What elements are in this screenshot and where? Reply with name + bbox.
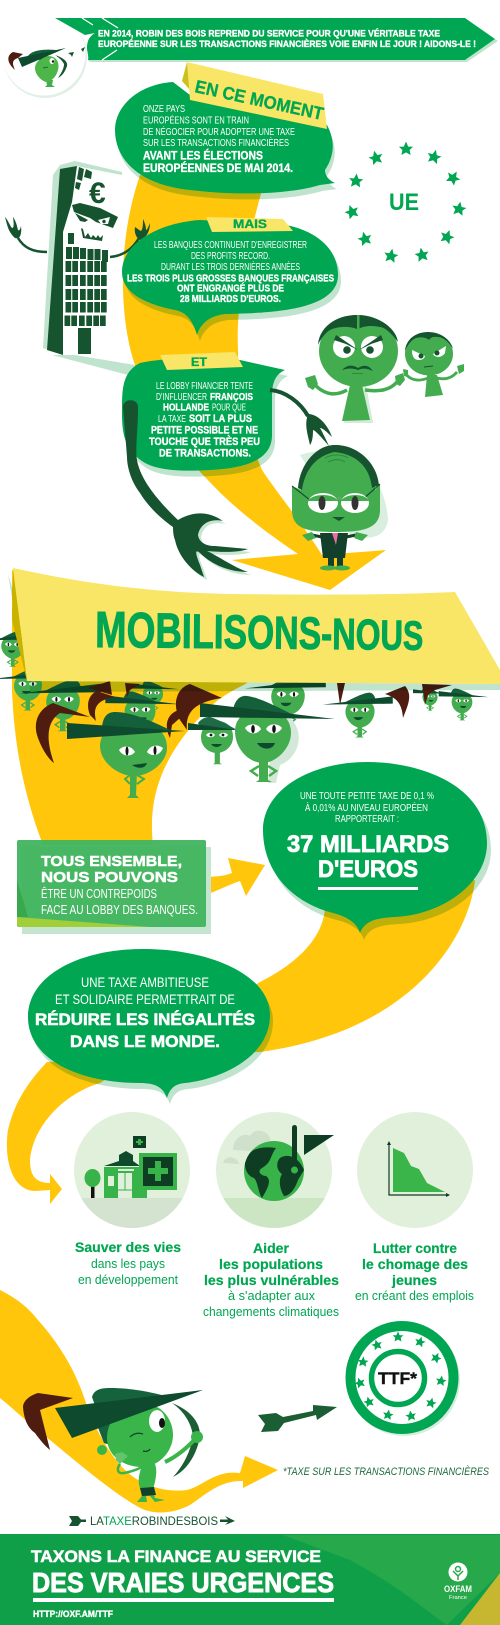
caption: sauver des vies — [75, 1240, 181, 1287]
panel text: TOUS ENSEMBLE, — [41, 853, 182, 870]
footer text: TAXONS LA FINANCE AU SERVICE — [31, 1547, 321, 1566]
bank arms and claws — [18, 238, 139, 257]
footer text — [31, 1547, 334, 1620]
yellow ribbon: bottom section with arrow — [0, 1290, 278, 1512]
flag: et: ET — [191, 355, 208, 369]
Oxfam logo — [444, 1562, 472, 1601]
Oxfam logo: France — [449, 1595, 467, 1601]
bubble text: LA TAXE — [158, 413, 186, 425]
bubble text: FRANÇOIS — [210, 391, 253, 403]
bubble text: DURANT LES TROIS DERNIÈRES ANNÉES — [161, 260, 300, 273]
bubble text: POUR QUE — [212, 402, 246, 414]
header text — [98, 28, 476, 50]
bubble text: SUR LES TRANSACTIONS FINANCIÈRES — [143, 136, 289, 149]
bubble text: DE TRANSACTIONS. — [159, 448, 251, 460]
bubble text: ONT ENGRANGÉ PLUS DE — [177, 282, 284, 294]
bubble text: DES PROFITS RECORD. — [191, 250, 270, 262]
caption: aider les populations: les plus vulnérables — [204, 1273, 339, 1288]
caption: lutter contre le chomage — [355, 1241, 474, 1303]
flag fold — [182, 62, 190, 90]
bubble text — [287, 790, 449, 890]
Hollande character — [292, 445, 388, 570]
bubble text: 37 MILLIARDS — [287, 831, 449, 858]
bubble text: LES TROIS PLUS GROSSES BANQUES FRANÇAISES — [127, 272, 334, 284]
bubble text: D'INFLUENCER — [156, 391, 207, 403]
bubble text — [127, 239, 334, 305]
bubble text: LES BANQUES CONTINUENT D'ENREGISTRER — [154, 239, 307, 251]
panel text: ÊTRE UN CONTREPOIDS — [41, 886, 157, 901]
small character with short hat — [188, 717, 237, 764]
flag: en ce moment — [187, 62, 327, 129]
bubble text: D'EUROS — [318, 856, 418, 883]
bubble: en ce moment — [115, 62, 337, 199]
TTF stars — [353, 1331, 447, 1421]
bubble text: À 0,01% AU NIVEAU EUROPÉEN — [305, 801, 428, 814]
bubble text: LE LOBBY FINANCIER TENTE — [156, 380, 253, 392]
bubble text: RAPPORTERAIT : — [335, 813, 399, 825]
footer text: DES VRAIES URGENCES — [32, 1567, 334, 1598]
euro sign: € — [89, 177, 106, 210]
panel text: NOUS POUVONS — [41, 869, 178, 886]
yellow ribbon: top section — [123, 175, 386, 590]
bubble text: AVANT LES ÉLECTIONS — [143, 150, 263, 162]
footer band — [0, 1534, 500, 1625]
bubble text: DANS LE MONDE. — [70, 1032, 220, 1051]
bubble text: EUROPÉENS SONT EN TRAIN — [143, 114, 249, 126]
UE label: UE — [389, 189, 419, 216]
big robin archer — [23, 1388, 203, 1502]
EU stars — [343, 142, 467, 263]
flag: mais — [206, 217, 293, 232]
small robin bubble — [2, 12, 87, 98]
icon: falling chart — [357, 1112, 473, 1228]
flag: et — [160, 352, 243, 370]
bubble: mais — [122, 217, 341, 341]
caption: aider les populations: changements climatiques — [203, 1305, 339, 1319]
caption: sauver des vies: dans les pays — [91, 1257, 165, 1271]
bubble text — [35, 974, 255, 1051]
caption: sauver des vies: en développement — [78, 1273, 179, 1287]
bubble text — [149, 380, 260, 460]
bank building — [5, 161, 150, 376]
banner: mobilisons-nous — [8, 568, 500, 692]
header arrow banner — [55, 18, 498, 62]
bubble text: RÉDUIRE LES INÉGALITÉS — [35, 1010, 255, 1029]
caption: lutter contre le chomage: en créant des emplois — [355, 1289, 474, 1303]
bubble text: TOUCHE QUE TRÈS PEU — [149, 435, 260, 448]
bubble text: ET SOLIDAIRE PERMETTRAIT DE — [55, 991, 235, 1007]
yellow arrow: towards 37 milliards — [200, 858, 265, 897]
angry character: small — [403, 332, 464, 397]
Oxfam logo: OXFAM — [444, 1584, 472, 1594]
flag: mais: MAIS — [233, 219, 267, 231]
caption: aider les populations — [203, 1241, 339, 1319]
TTF badge — [348, 1324, 460, 1436]
TTF label: TTF* — [378, 1369, 417, 1388]
caption: lutter contre le chomage: Lutter contre — [373, 1241, 457, 1256]
bubble text: SOIT LA PLUS — [189, 413, 252, 425]
small robin — [8, 47, 85, 87]
crowd of hooded characters — [0, 631, 489, 798]
yellow ribbon: big curve with arrow — [7, 880, 475, 1204]
flag: en ce moment: EN CE MOMENT — [193, 76, 325, 124]
caption: aider les populations: Aider — [253, 1241, 290, 1256]
bubble text: UNE TAXE AMBITIEUSE — [81, 974, 209, 990]
panel: tous ensemble — [17, 840, 211, 934]
caption: aider les populations: les populations — [219, 1257, 323, 1272]
caption: lutter contre le chomage: le chomage des — [362, 1257, 468, 1272]
bubble: 37 milliards — [263, 762, 491, 940]
icon: hospital — [74, 1112, 190, 1228]
logo: la taxe robin des bois: LATAXEROBINDESBOIS — [90, 1514, 218, 1528]
bubble: et — [122, 352, 288, 477]
bubble: réduire les inégalités — [28, 949, 273, 1104]
caption: aider les populations: à s'adapter aux — [228, 1289, 316, 1303]
bubble text — [143, 103, 295, 175]
caption: sauver des vies: Sauver des vies — [75, 1240, 181, 1255]
banner title: MOBILISONS-NOUS — [95, 600, 424, 661]
panel text: FACE AU LOBBY DES BANQUES. — [41, 903, 198, 917]
bubble text: 28 MILLIARDS D'EUROS. — [180, 293, 281, 305]
caption: lutter contre le chomage: jeunes — [391, 1273, 437, 1288]
big front character — [36, 703, 185, 798]
bubble text: EUROPÉENNES DE MAI 2014. — [143, 162, 293, 175]
bubble text: UNE TOUTE PETITE TAXE DE 0,1 % — [300, 790, 434, 802]
bubble text: PETITE POSSIBLE ET NE — [151, 424, 258, 436]
bubble text: ONZE PAYS — [143, 103, 185, 115]
footer text: HTTP://OXF.AM/TTF — [33, 1609, 113, 1620]
lobby long arm with claw — [123, 400, 251, 580]
arrow to TTF badge — [258, 1405, 337, 1432]
header text: EN 2014, ROBIN DES BOIS REPREND DU SERVICE POUR QU'UNE VÉRITABLE TAXE — [98, 28, 440, 40]
bubble text: DE NÉGOCIER POUR ADOPTER UNE TAXE — [143, 125, 295, 138]
icon: globe and thermometer — [216, 1112, 334, 1228]
panel text — [41, 853, 198, 917]
bubble text: HOLLANDE — [163, 402, 209, 414]
angry character: big — [305, 315, 405, 423]
lobby short arm with claw — [270, 390, 332, 446]
yellow ribbon: middle section — [12, 570, 250, 845]
